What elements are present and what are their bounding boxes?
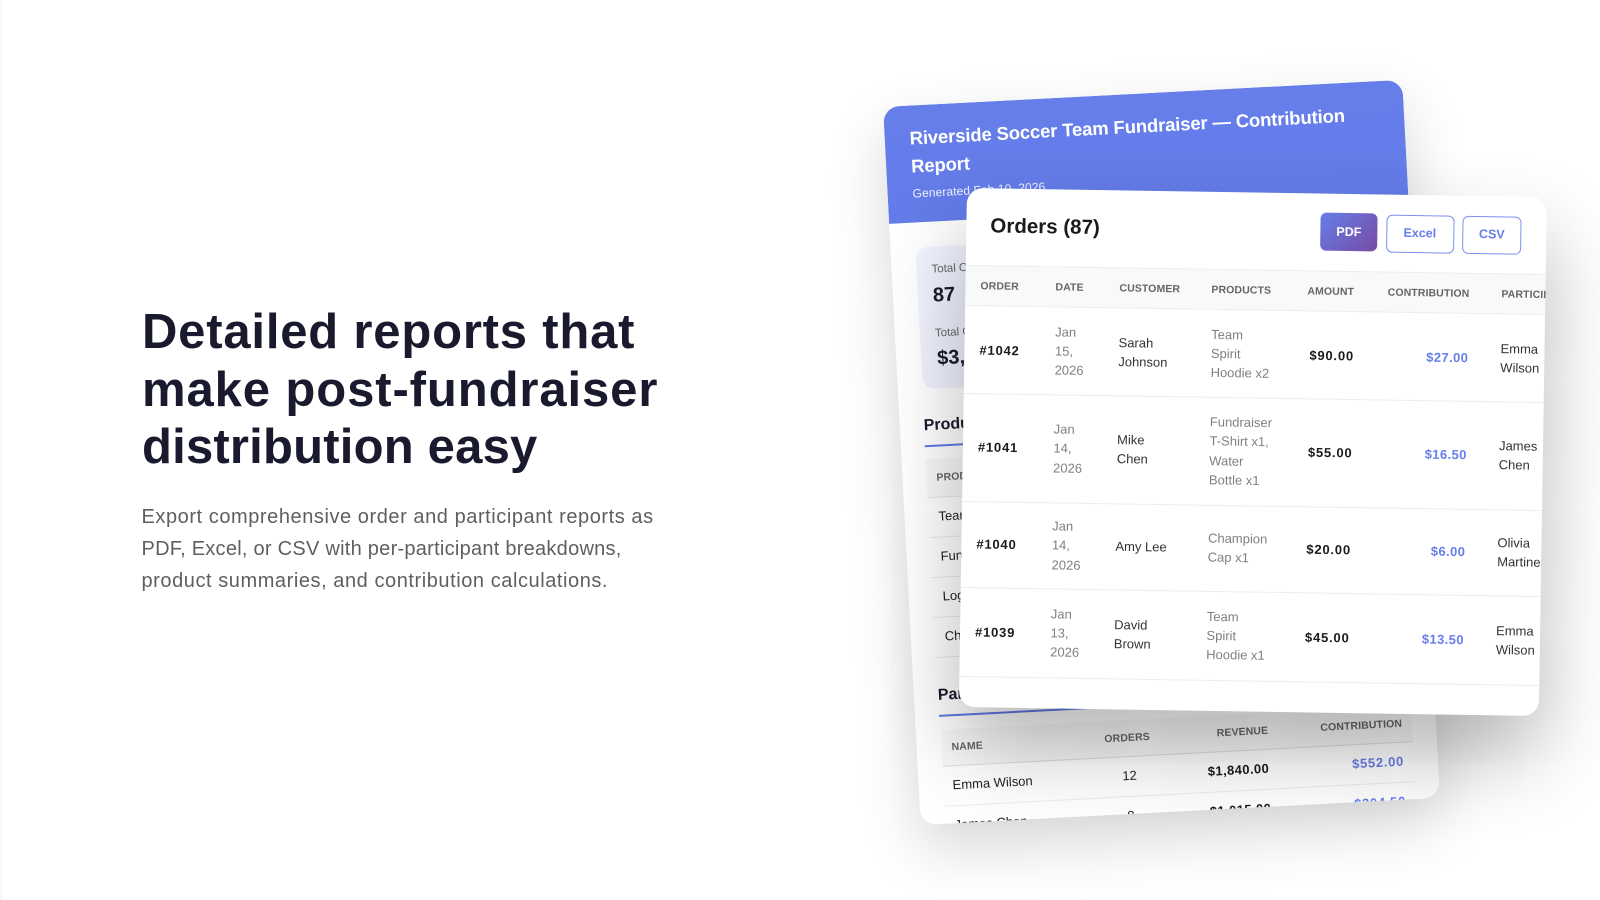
order row 1041: 14, xyxy=(1053,440,1071,456)
order row 1041 xyxy=(962,392,1543,511)
order row 1039: Emma xyxy=(1496,622,1533,638)
order row 1039: 13, xyxy=(1050,625,1068,640)
description text xyxy=(142,506,654,592)
products table header: PRODUCT xyxy=(936,468,989,483)
participants section heading: Participant Breakdown xyxy=(937,677,1111,703)
order row 1042: Jan xyxy=(1055,323,1076,339)
order row 1040: Olivia xyxy=(1497,535,1530,550)
order row 1039: David xyxy=(1114,616,1147,632)
description text: product summaries, and contribution calculations. xyxy=(142,570,608,592)
order row 1041: 2026 xyxy=(1053,460,1082,475)
report title: Report xyxy=(911,152,970,176)
participant row: james chen: 8 xyxy=(1127,807,1135,823)
order row 1039: #1039 xyxy=(974,624,1015,639)
order row 1042 xyxy=(963,305,1545,403)
order row 1041: Water xyxy=(1209,452,1243,468)
title: make post-fundraiser xyxy=(142,363,658,417)
orders table header: ORDER xyxy=(980,280,1018,292)
order row 1042: #1042 xyxy=(979,342,1019,357)
order row 1039 xyxy=(959,586,1540,686)
button: Excel export: Excel xyxy=(1403,225,1436,240)
order row 1040 xyxy=(960,500,1542,597)
order row 1040: $6.00 xyxy=(1430,543,1465,559)
product row: champion cap: Champion Cap xyxy=(944,623,1032,643)
order row 1041: Fundraiser xyxy=(1209,414,1272,430)
order row 1040: Jan xyxy=(1052,518,1073,533)
order row 1042: 15, xyxy=(1054,343,1073,358)
stat: total revenue value: $3,240.00 xyxy=(937,342,1027,369)
orders table header xyxy=(965,264,1545,315)
button: CSV export xyxy=(1462,215,1521,254)
participants table header xyxy=(941,705,1413,766)
participants table header: NAME xyxy=(951,739,983,753)
panel: contribution report (back card) xyxy=(883,79,1440,825)
order row 1040: 14, xyxy=(1051,537,1070,553)
order row 1042: Wilson xyxy=(1500,359,1539,375)
products table header xyxy=(925,434,1400,498)
description text: PDF, Excel, or CSV with per-participant breakdowns, xyxy=(142,538,622,560)
order row 1039: 2026 xyxy=(1050,644,1079,659)
participant row: james chen xyxy=(954,793,1406,825)
order row 1042: Johnson xyxy=(1118,353,1167,369)
order row 1041: Chen xyxy=(1498,457,1529,472)
order row 1042: $27.00 xyxy=(1426,349,1468,364)
products table xyxy=(928,468,1049,658)
order row 1040: 2026 xyxy=(1051,557,1080,572)
order row 1041: Bottle x1 xyxy=(1208,472,1259,487)
panel: orders table (front card) xyxy=(958,188,1546,716)
participant row: emma wilson: 12 xyxy=(1122,767,1137,783)
order row 1042: $90.00 xyxy=(1309,347,1354,362)
orders table header: AMOUNT xyxy=(1307,285,1354,298)
orders table header: CUSTOMER xyxy=(1119,282,1180,295)
order row 1039: Wilson xyxy=(1495,641,1534,657)
order row 1041: #1041 xyxy=(977,439,1018,455)
stat: total orders label: Total Orders xyxy=(931,260,994,275)
order row 1041: Jan xyxy=(1053,421,1074,436)
title: distribution easy xyxy=(142,420,537,474)
report title xyxy=(909,104,1345,176)
participants table xyxy=(942,717,1415,825)
order row 1039: Brown xyxy=(1113,635,1150,651)
order row 1042: 2026 xyxy=(1054,362,1083,378)
stat: total orders value: 87 xyxy=(932,283,956,306)
order row 1039: Spirit xyxy=(1206,627,1236,643)
order row 1041: T-Shirt x1, xyxy=(1209,433,1268,449)
orders table header: CONTRIBUTION xyxy=(1387,286,1469,299)
order row 1041: Mike xyxy=(1116,432,1144,447)
participants table header: CONTRIBUTION xyxy=(1320,717,1402,733)
button: PDF export xyxy=(1320,212,1377,251)
order row 1041: $16.50 xyxy=(1424,446,1466,462)
orders heading: Orders (87) xyxy=(990,214,1099,239)
orders table header: DATE xyxy=(1055,281,1083,293)
order row 1039: Hoodie x1 xyxy=(1206,646,1264,662)
participant row: emma wilson: $1,840.00 xyxy=(1207,760,1270,778)
button: Excel export xyxy=(1385,214,1454,253)
order row 1039: Jan xyxy=(1050,605,1071,621)
products section heading: Product Summary xyxy=(923,410,1062,434)
order row 1041: Chen xyxy=(1116,451,1147,466)
button: CSV export: CSV xyxy=(1478,227,1504,241)
description text: Export comprehensive order and participant reports as xyxy=(142,506,654,528)
order row 1039: $45.00 xyxy=(1304,629,1349,644)
button: PDF export: PDF xyxy=(1336,224,1361,239)
product row: team spirit hoodie: Team Spirit Hoodie xyxy=(938,502,1049,523)
order row 1039: $13.50 xyxy=(1421,631,1464,646)
order row 1042: Hoodie x2 xyxy=(1210,364,1269,380)
participant row: emma wilson xyxy=(943,742,1415,806)
participants table header: ORDERS xyxy=(1104,730,1150,745)
order row 1042: Emma xyxy=(1500,340,1538,356)
stat: total revenue label: Total Contribution xyxy=(935,322,1025,339)
order row 1039: Team xyxy=(1206,608,1238,623)
generated date: Generated Feb 10, 2026 xyxy=(912,179,1046,200)
summary stats box xyxy=(915,222,1394,389)
participant row: emma wilson: $552.00 xyxy=(1352,753,1404,771)
order row 1042: Sarah xyxy=(1118,334,1153,350)
order row 1040: Cap x1 xyxy=(1207,549,1249,565)
order row 1041: James xyxy=(1498,438,1537,453)
order row 1040: Amy Lee xyxy=(1115,538,1166,554)
order row 1040: $20.00 xyxy=(1306,541,1351,557)
product row: fundraiser t-shirt: Fundraiser T-Shirt xyxy=(940,543,1045,563)
participant row: james chen: $1,015.00 xyxy=(1209,800,1272,818)
orders table header: PRODUCTS xyxy=(1211,283,1271,296)
order row 1042: Spirit xyxy=(1210,345,1240,361)
order row 1042: Team xyxy=(1211,326,1243,341)
participant row: emma wilson: Emma Wilson xyxy=(952,773,1033,792)
report header banner xyxy=(883,79,1408,223)
participants table header: REVENUE xyxy=(1216,724,1268,739)
order row 1040: Champion xyxy=(1207,530,1267,546)
report title: Riverside Soccer Team Fundraiser — Contribution xyxy=(909,104,1345,148)
title xyxy=(142,305,658,474)
order row 1040: #1040 xyxy=(976,536,1016,552)
participant row: james chen: $304.50 xyxy=(1354,793,1406,811)
title: Detailed reports that xyxy=(142,305,635,359)
order row 1041: $55.00 xyxy=(1307,444,1352,460)
product row: logo water bottle: Logo Water Bottle xyxy=(942,583,1047,603)
order row 1040: Martinez xyxy=(1497,554,1546,570)
